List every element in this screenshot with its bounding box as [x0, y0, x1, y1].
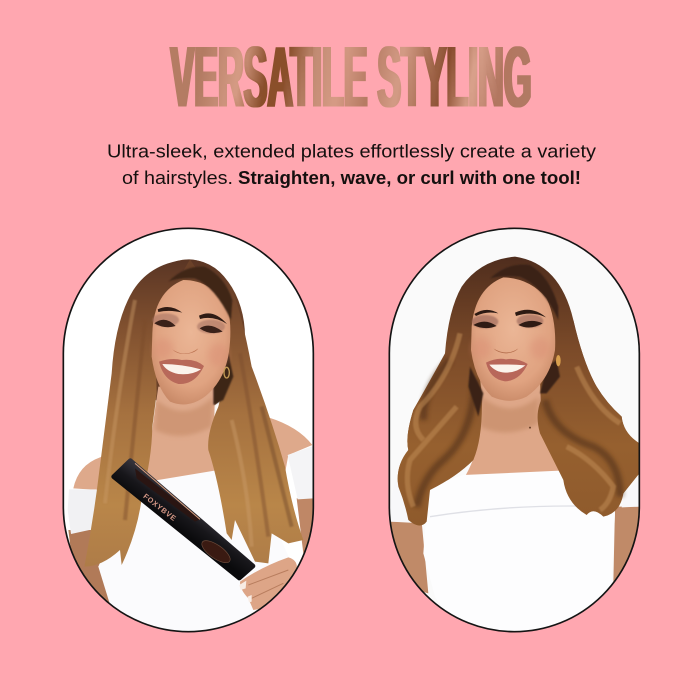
teeth: [162, 364, 201, 374]
nose: [172, 348, 198, 354]
hair waves dark: [417, 360, 620, 507]
eye shadow: [472, 315, 498, 328]
teeth: [489, 364, 525, 373]
neck shade: [155, 397, 213, 436]
right pill outline: [389, 228, 639, 632]
lips: [159, 359, 204, 384]
top: [423, 470, 615, 562]
hair right lock: [190, 259, 303, 563]
neck shade: [480, 397, 538, 433]
hair strands: [105, 300, 292, 547]
iron oval window: [202, 540, 230, 563]
left sleeve: [68, 489, 97, 534]
ear shadow: [468, 360, 560, 417]
hair shadow at the ear: [213, 353, 233, 405]
left arm: [68, 530, 110, 602]
eyebrows: [158, 307, 227, 324]
finger lines: [248, 570, 288, 598]
right arm: [296, 498, 312, 554]
lips: [486, 359, 528, 381]
hair waves light: [407, 333, 620, 510]
front hair left: [398, 380, 482, 526]
chest and neck: [465, 380, 563, 477]
styling iron: [114, 461, 253, 578]
intro text: [107, 142, 596, 188]
sleeves: [390, 480, 639, 523]
hand: [240, 557, 297, 610]
earring: [556, 355, 561, 366]
hair parting: [168, 267, 232, 320]
eyes: [154, 320, 223, 333]
head back hair: [156, 259, 245, 406]
eyebrows: [474, 310, 546, 317]
cheeks: [472, 338, 492, 359]
eyes: [473, 321, 543, 328]
hair left lock: [84, 259, 190, 567]
front hair right: [538, 320, 639, 517]
cheeks: [158, 341, 172, 356]
arms: [390, 507, 640, 593]
right sleeve: [288, 446, 313, 499]
intro text: Straighten, wave, or curl with one tool!: [238, 168, 581, 188]
face: [152, 280, 230, 404]
face: [471, 277, 555, 401]
iron brand name: FOXYBVE: [141, 492, 178, 523]
back hair: [398, 257, 639, 525]
intro text: of hairstyles.: [122, 168, 233, 188]
nose: [493, 348, 518, 353]
nails: [239, 581, 252, 602]
eye shadow: [152, 313, 179, 327]
top fold lines: [430, 506, 607, 517]
iron copper line: [135, 463, 200, 519]
shoulders and chest: [73, 387, 312, 490]
panel: wavy hair photo: [389, 228, 640, 632]
left pill outline: [63, 228, 313, 632]
top: [98, 470, 216, 606]
panel: straight hair photo: [63, 228, 315, 632]
iron plate: [135, 468, 200, 522]
earring: [224, 367, 229, 378]
mole: [529, 427, 531, 429]
hair parting: [490, 264, 558, 320]
intro text: Ultra-sleek, extended plates effortlessly create a variety: [107, 142, 596, 162]
